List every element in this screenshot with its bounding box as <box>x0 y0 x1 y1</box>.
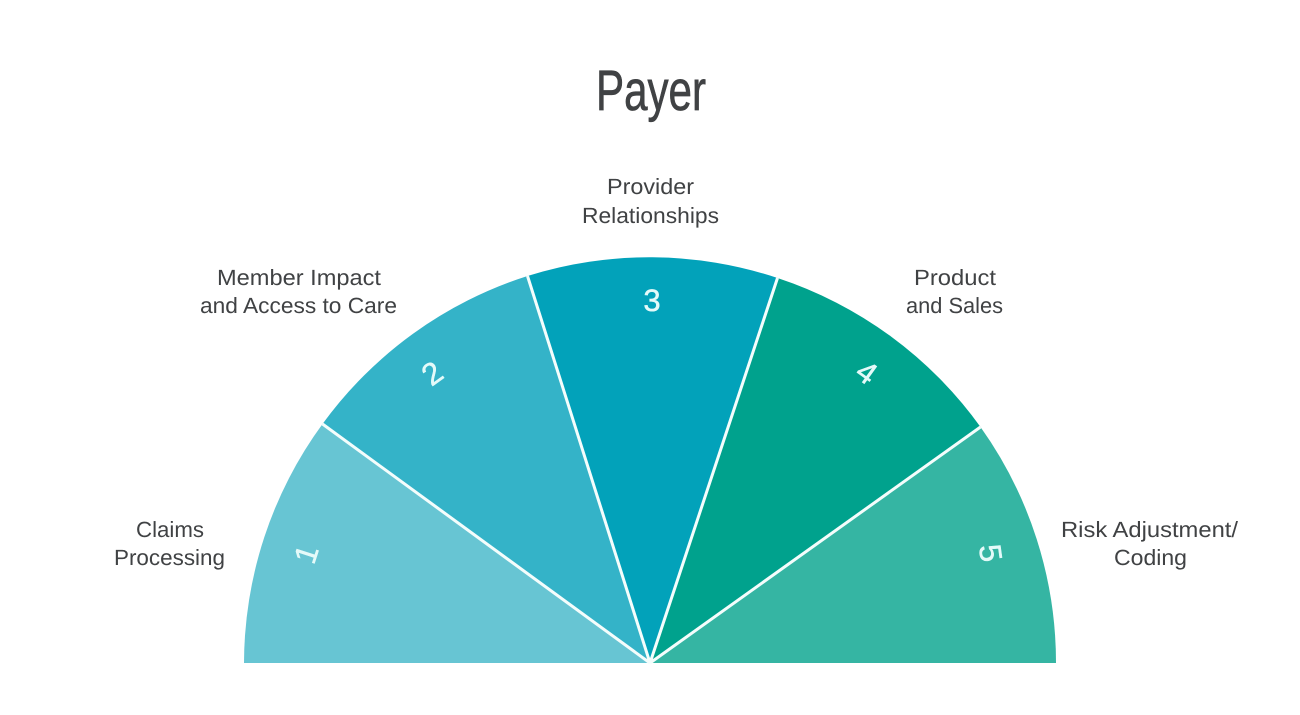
number 3: 3 <box>643 283 661 318</box>
label: Provider Relationships: Relationships <box>582 203 719 228</box>
label: Provider Relationships: Provider <box>607 174 694 199</box>
label: Member Impact and Access to Care <box>200 265 397 318</box>
label: Member Impact and Access to Care: and Access to Care <box>200 293 397 318</box>
segment 4: Product and Sales <box>650 278 980 663</box>
segment 3: Provider Relationships <box>528 257 778 663</box>
label: Claims Processing <box>114 517 225 570</box>
label: Provider Relationships <box>582 174 719 228</box>
label: Product and Sales <box>906 265 1003 318</box>
label: Claims Processing: Processing <box>114 545 225 570</box>
label: Claims Processing: Claims <box>136 517 204 542</box>
segment 1: Claims Processing <box>244 424 650 663</box>
segment 5: Risk Adjustment <box>650 427 1056 663</box>
label: Risk Adjustment/Coding <box>1061 517 1239 570</box>
number 4: 4 <box>849 353 884 392</box>
segment 2: Member Impact <box>322 276 650 663</box>
semicircle fan chart <box>244 257 1056 663</box>
number 1: 1 <box>287 541 326 568</box>
label: Product and Sales: Product <box>914 265 996 290</box>
title: Payer <box>596 59 706 123</box>
number 5: 5 <box>972 542 1009 564</box>
label: Risk Adjustment/Coding: Coding <box>1114 545 1187 570</box>
label: Product and Sales: and Sales <box>906 293 1003 318</box>
number 2: 2 <box>415 354 450 393</box>
label: Member Impact and Access to Care: Member Impact <box>217 265 381 290</box>
label: Risk Adjustment/Coding: Risk Adjustment/ <box>1061 517 1239 542</box>
